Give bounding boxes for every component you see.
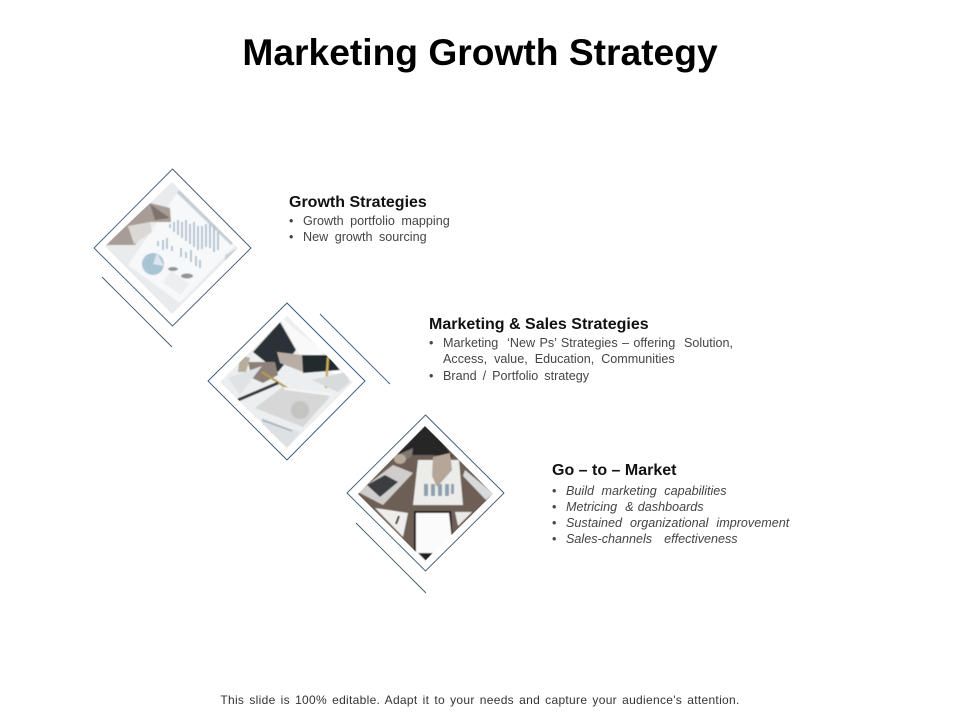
text block: go to market: • [552, 532, 556, 546]
text block: go to market: • [552, 500, 556, 514]
text block: go to market: • [552, 516, 556, 530]
text block: marketing and sales strategies: • [429, 369, 433, 383]
text block: growth strategies: Growth Strategies [289, 194, 427, 211]
text block: growth strategies: • [289, 214, 293, 228]
text block: growth strategies: New growth sourcing [303, 230, 427, 244]
text block: growth strategies [289, 194, 450, 244]
text block: go to market: Go – to – Market [552, 462, 676, 479]
text block: go to market [552, 462, 790, 546]
icon: growth strategies photo diamond [94, 169, 251, 347]
text block: go to market: Sales-channels effectiveness [566, 532, 738, 546]
text block: go to market: Sustained organizational improvement [566, 516, 789, 530]
text block: marketing and sales strategies: Marketing ‘New Ps’ Strategies – offering Solution, [443, 336, 733, 350]
icon: marketing and sales photo diamond [208, 303, 390, 460]
text block: go to market: Metricing & dashboards [566, 500, 704, 514]
text block: marketing and sales strategies: Brand / Portfolio strategy [443, 369, 589, 383]
icon: go to market photo diamond [347, 415, 504, 593]
text block: go to market: Build marketing capabilities [566, 484, 727, 498]
text block: growth strategies: • [289, 230, 293, 244]
text block: marketing and sales strategies: • [429, 336, 433, 350]
footer note: This slide is 100% editable. Adapt it to your needs and capture your audience's attention. [220, 693, 740, 707]
text block: marketing and sales strategies: Access, value, Education, Communities [443, 352, 675, 366]
text block: growth strategies: Growth portfolio mapping [303, 214, 450, 228]
text block: marketing and sales strategies [429, 316, 733, 383]
title: Marketing Growth Strategy [242, 31, 718, 73]
text block: go to market: • [552, 484, 556, 498]
text block: marketing and sales strategies: Marketing & Sales Strategies [429, 316, 649, 333]
